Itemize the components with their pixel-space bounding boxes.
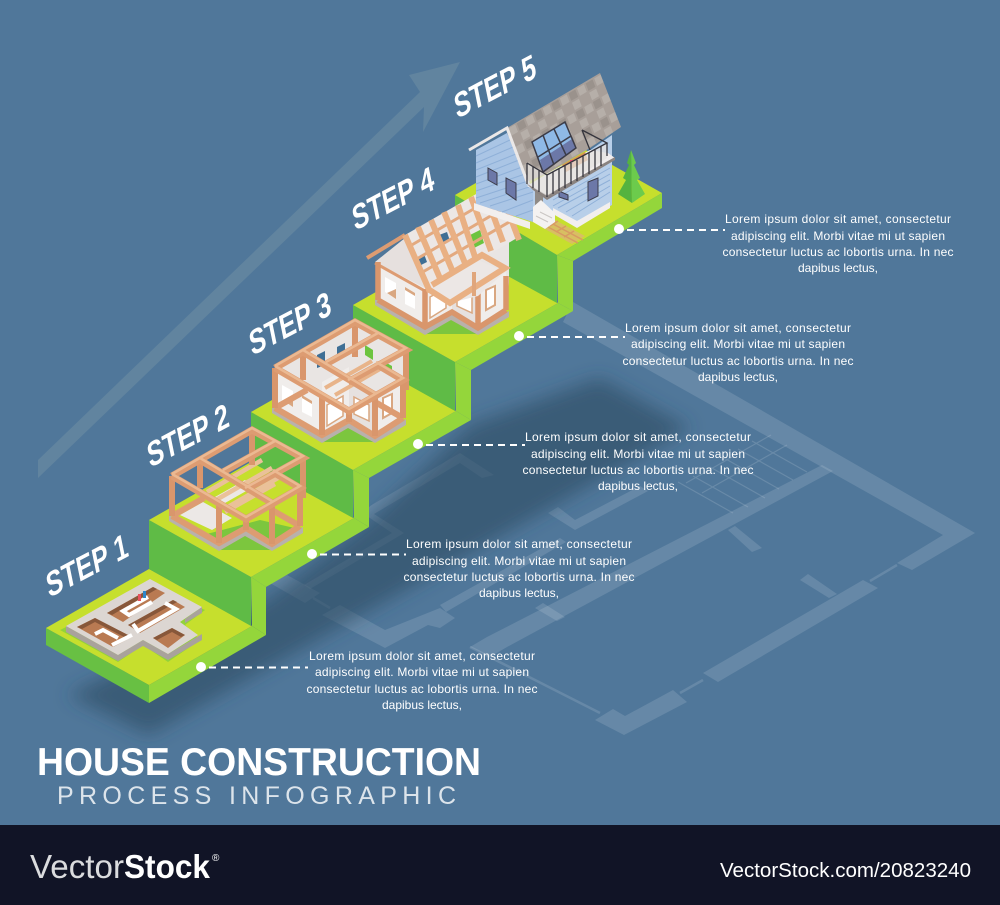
- step labels: [43, 47, 539, 606]
- callout 3: adipiscing elit. Morbi vitae mi ut sapien: [531, 447, 745, 461]
- callout 3: consectetur luctus ac lobortis urna. In nec: [522, 463, 754, 477]
- tree: [631, 150, 645, 203]
- callout 4: [514, 321, 854, 384]
- callout 2: dapibus lectus,: [479, 586, 559, 600]
- windows in back wall: [317, 343, 345, 368]
- step 4 label: STEP 4: [349, 159, 437, 239]
- porch frame: [428, 260, 505, 303]
- callout 3: [413, 430, 754, 493]
- house stage 5: finished house: [469, 73, 645, 244]
- door: [535, 190, 543, 208]
- callout 1: adipiscing elit. Morbi vitae mi ut sapien: [315, 665, 529, 679]
- callout 2: consectetur luctus ac lobortis urna. In nec: [404, 570, 634, 584]
- callout 4: Lorem ipsum dolor sit amet, consectetur: [625, 321, 851, 335]
- callout 4: adipiscing elit. Morbi vitae mi ut sapien: [631, 337, 845, 351]
- step 3 riser: [251, 412, 353, 518]
- pipe risers: [138, 594, 141, 601]
- step 5 label: STEP 5: [451, 47, 539, 127]
- step 1 tread: [46, 569, 252, 685]
- entrance stairs: [533, 200, 555, 229]
- callout 5: dapibus lectus,: [798, 261, 878, 275]
- step 3 label: STEP 3: [246, 284, 334, 364]
- step 4 riser: [353, 305, 455, 411]
- step 3 tread: [251, 354, 456, 470]
- callout 2: adipiscing elit. Morbi vitae mi ut sapien: [412, 554, 626, 568]
- siding lines: [476, 140, 610, 216]
- blueprint stairwell lines: [678, 435, 807, 513]
- dormer glass: [532, 122, 576, 172]
- cast shadow under staircase: [68, 378, 690, 735]
- gable end: [375, 238, 425, 288]
- house stage 2: timber frame: [169, 428, 303, 551]
- callout 5: [614, 212, 954, 275]
- step 1 label: STEP 1: [43, 526, 131, 606]
- callout 5: adipiscing elit. Morbi vitae mi ut sapien: [731, 229, 945, 243]
- white plinth: [474, 203, 530, 229]
- wall windows: [488, 168, 598, 201]
- callout 2: [307, 537, 634, 600]
- balcony floor: [527, 150, 615, 197]
- callout 1: [196, 649, 538, 712]
- blueprint floor plan: [270, 302, 975, 735]
- callout 1: dapibus lectus,: [382, 698, 462, 712]
- callout 3: dapibus lectus,: [598, 479, 678, 493]
- house stage 1: foundation: [60, 579, 205, 662]
- footer logo: [30, 848, 220, 885]
- step 5 riser: [455, 195, 557, 303]
- interior joists: [325, 361, 382, 395]
- underground pipes: [95, 597, 176, 645]
- step 2 tread: [149, 462, 354, 577]
- balcony table: [562, 152, 588, 172]
- gable wall: [476, 133, 533, 222]
- callout 5: consectetur luctus ac lobortis urna. In nec: [722, 245, 954, 259]
- rafters: [405, 182, 519, 292]
- staircase platform: [46, 135, 662, 703]
- growth arrow: [38, 62, 460, 478]
- callout 1: consectetur luctus ac lobortis urna. In nec: [306, 682, 538, 696]
- footer logo: Vector: [30, 848, 124, 885]
- callout 1: Lorem ipsum dolor sit amet, consectetur: [309, 649, 535, 663]
- footer logo: Stock: [124, 848, 211, 885]
- callout 4: consectetur luctus ac lobortis urna. In nec: [622, 354, 854, 368]
- callout 4: dapibus lectus,: [698, 370, 778, 384]
- title: HOUSE CONSTRUCTION: [37, 741, 481, 784]
- callout 5: Lorem ipsum dolor sit amet, consectetur: [725, 212, 951, 226]
- roof: [507, 73, 621, 182]
- blueprint thin walls: [313, 565, 897, 713]
- footer image id: VectorStock.com/20823240: [720, 860, 971, 882]
- footer bar: [0, 825, 1000, 905]
- side wall: [533, 135, 612, 225]
- step 4 tread: [353, 247, 558, 362]
- step 5 tread: [455, 135, 662, 255]
- step 2 riser: [149, 520, 251, 626]
- roof deck: [405, 182, 517, 290]
- step 2 label: STEP 2: [144, 396, 232, 476]
- wall frame posts: [378, 262, 506, 328]
- subtitle: PROCESS INFOGRAPHIC: [57, 782, 456, 810]
- callout 3: Lorem ipsum dolor sit amet, consectetur: [525, 430, 751, 444]
- step 1 side faces: [46, 628, 149, 703]
- purlins: [410, 193, 511, 273]
- callout 2: Lorem ipsum dolor sit amet, consectetur: [406, 537, 632, 551]
- fascia: [469, 128, 528, 184]
- footer logo: ®: [212, 853, 220, 864]
- paved path: [543, 220, 585, 244]
- house stage 3: walls: [272, 320, 406, 443]
- house stage 4: roof frame: [367, 182, 519, 335]
- balcony railing: [527, 143, 607, 196]
